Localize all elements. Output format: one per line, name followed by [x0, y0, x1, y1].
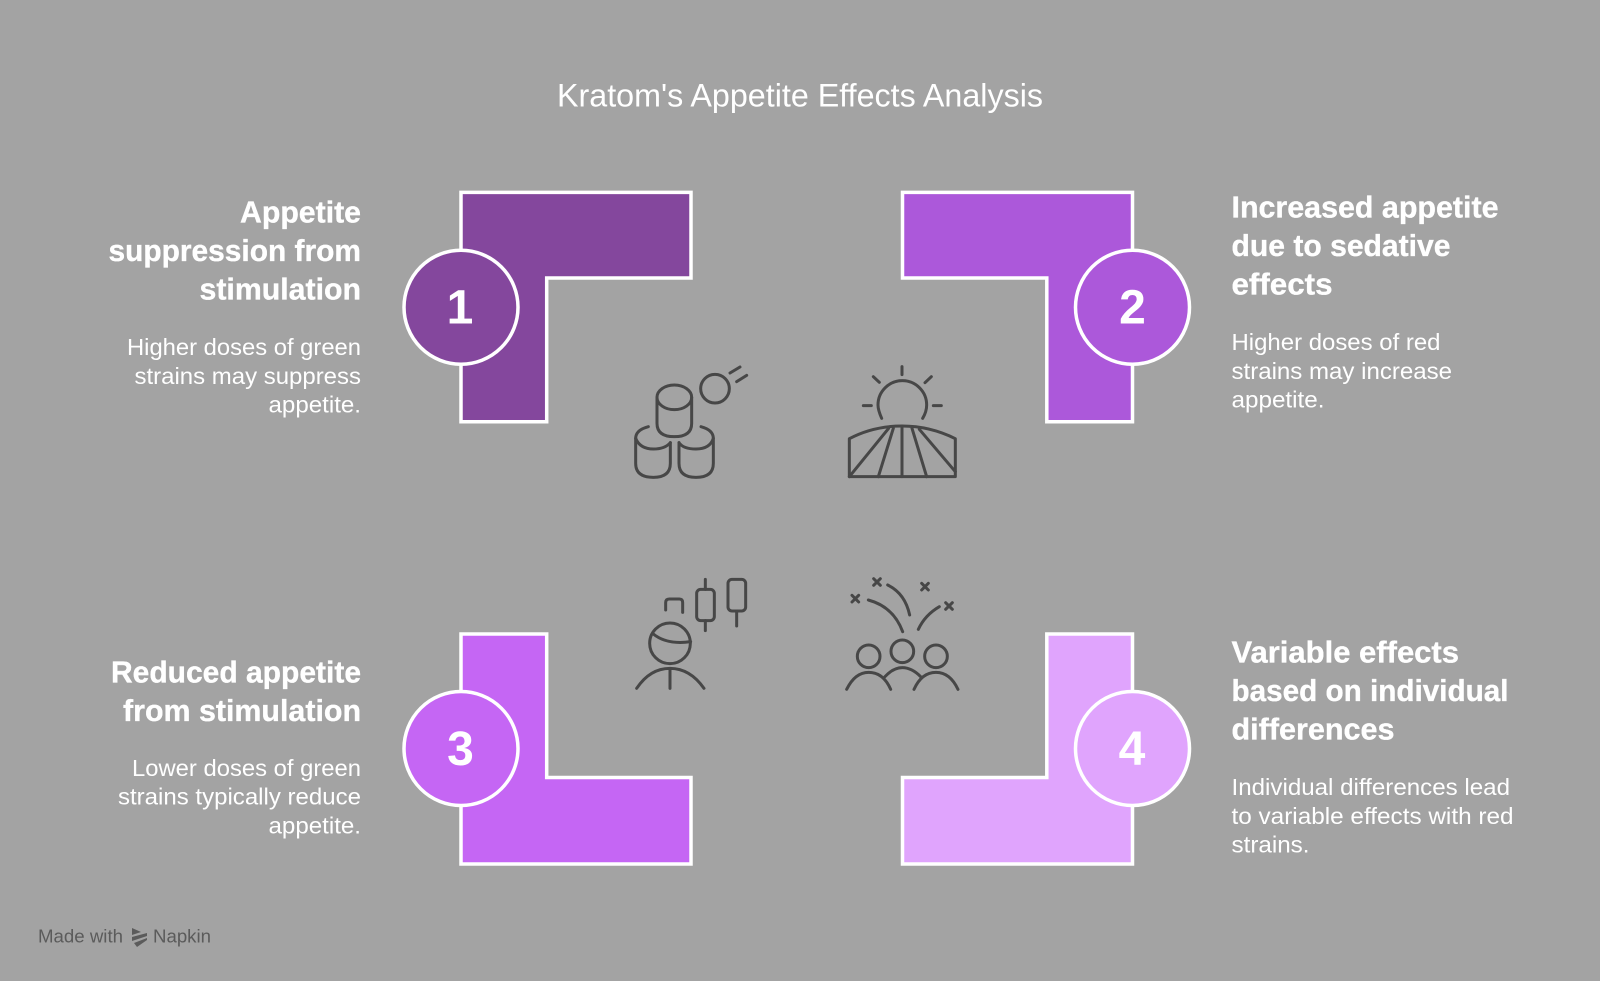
description: step 4 [1232, 774, 1514, 858]
heading: step 2: effects [1232, 268, 1332, 302]
heading: step 4: based on individual [1232, 674, 1508, 708]
heading: step 1 [108, 196, 361, 306]
heading: step 3 [111, 656, 361, 728]
panel: step 4 shape: 4 [1119, 723, 1146, 776]
panel: step 3 shape: 3 [447, 723, 474, 776]
description: step 1: appetite. [268, 392, 361, 418]
icon: stacked cylinders with ball [636, 367, 747, 477]
heading: step 2 [1232, 191, 1498, 302]
description: step 4: Individual differences lead [1232, 774, 1510, 800]
description: step 2: strains may increase [1232, 358, 1452, 384]
description: step 3: appetite. [268, 812, 361, 838]
text block: step 2 [1232, 191, 1498, 413]
heading: step 3: from stimulation [123, 694, 361, 728]
panel: step 1 shape [404, 192, 691, 422]
title: Kratom's Appetite Effects Analysis [557, 78, 1043, 114]
description: step 4: strains. [1232, 832, 1310, 858]
heading: step 4 [1232, 636, 1508, 746]
text block: step 3 [111, 656, 361, 838]
heading: step 1: stimulation [200, 272, 361, 306]
description: step 4: to variable effects with red [1232, 803, 1514, 829]
icon: person with candlestick chart [637, 579, 746, 688]
heading: step 1: Appetite [240, 196, 361, 230]
heading: step 4: differences [1232, 712, 1394, 746]
description: step 1 [127, 334, 361, 418]
heading: step 2: Increased appetite [1232, 191, 1498, 225]
icon: sun rising over field [849, 367, 955, 477]
panel: step 3 shape [404, 634, 691, 864]
text block: step 4 [1232, 636, 1514, 858]
heading: step 2: due to sedative [1232, 229, 1450, 263]
description: step 2: Higher doses of red [1232, 329, 1440, 355]
panel: step 2 shape: 2 [1119, 282, 1146, 334]
heading: step 3: Reduced appetite [111, 656, 361, 690]
footer: made with Napkin [38, 926, 211, 947]
description: step 3: Lower doses of green [132, 755, 361, 781]
panel: step 4 shape [902, 634, 1190, 864]
description: step 3 [118, 755, 361, 838]
heading: step 4: Variable effects [1232, 636, 1459, 670]
description: step 1: strains may suppress [134, 363, 361, 389]
description: step 1: Higher doses of green [127, 334, 361, 360]
footer: made with Napkin: Napkin [153, 926, 211, 946]
description: step 2 [1232, 329, 1452, 413]
panel: step 1 shape: 1 [447, 282, 473, 334]
heading: step 1: suppression from [108, 234, 361, 268]
footer: made with Napkin: Made with [38, 926, 123, 946]
text block: step 1 [108, 196, 361, 418]
panel: step 2 shape [902, 192, 1190, 422]
description: step 3: strains typically reduce [118, 784, 361, 810]
icon: group of people with fireworks [847, 579, 958, 689]
description: step 2: appetite. [1232, 387, 1324, 413]
